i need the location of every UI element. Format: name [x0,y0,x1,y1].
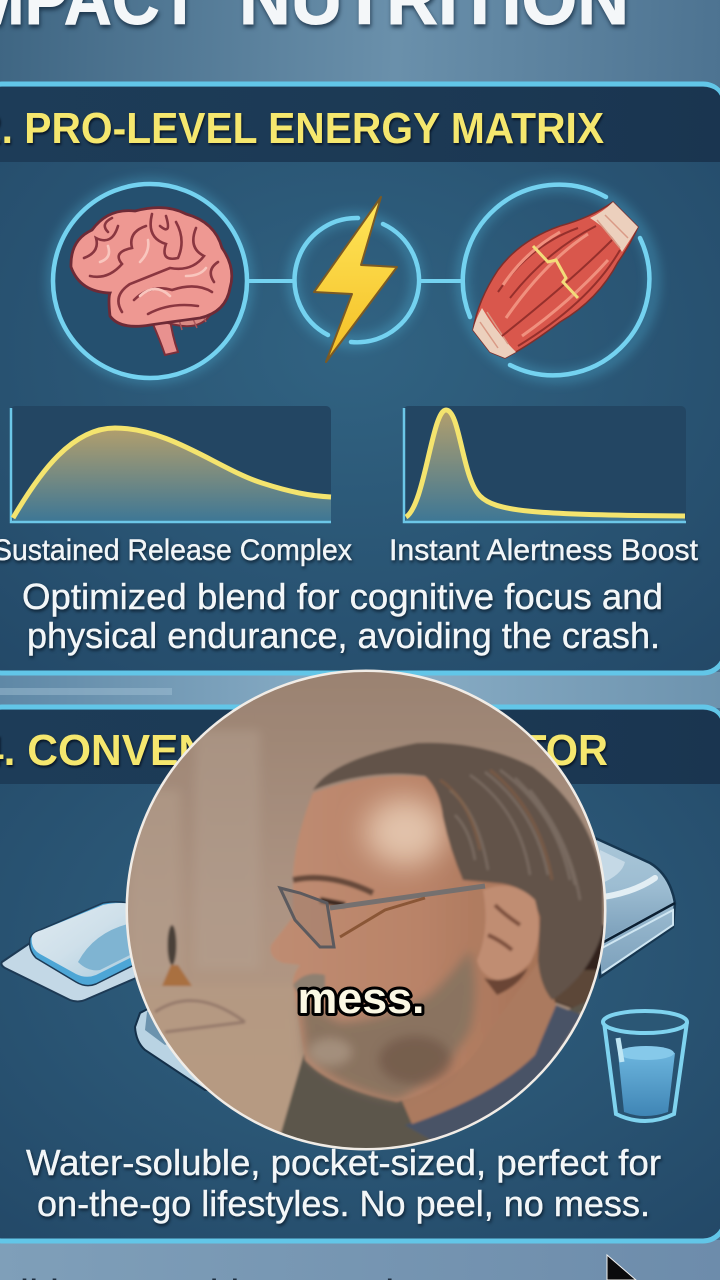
icon: lightning bolt [295,197,419,362]
chart: sustained release curve [10,406,331,522]
moustache [293,974,325,992]
face [270,776,540,1102]
forehead highlight [365,798,445,866]
panel: convenience factor [0,707,720,1241]
description text [22,576,663,656]
glasses [280,886,485,947]
icon: centre blister tablet [135,1000,240,1090]
caption: mess. [298,974,424,1023]
icon: left blister tablet [1,902,136,1002]
description text [26,1142,661,1224]
icon: right blister tablet [595,838,675,977]
chart labels: Instant Alertness Boost [389,534,699,567]
circular backdrop [127,671,605,1149]
description text: Water-soluble, pocket-sized, perfect for [26,1142,661,1183]
lower background band [0,1240,720,1280]
section header bar [0,710,720,784]
room wall and door [120,670,610,1150]
chart labels [0,534,699,567]
eyebrow and eye shadow [293,878,373,893]
chart labels: Sustained Release Complex [0,534,352,567]
connector lines [248,279,463,283]
neck [395,960,556,1124]
hair [313,743,603,1000]
gap strip between panels [0,672,720,708]
ring glow [53,184,654,378]
icon: mouse cursor [607,1255,636,1280]
heading [0,726,608,775]
icon: brain [53,184,247,378]
section header bar [0,87,720,162]
description text: Optimized blend for cognitive focus and [22,576,663,617]
icon: glass of water [603,1011,687,1121]
panel body [0,84,720,673]
ear [477,886,539,980]
icon: muscle [463,185,649,375]
figurine on shelf [162,925,192,986]
beard [300,950,475,1100]
title [0,0,629,40]
description text: physical endurance, avoiding the crash. [27,615,660,656]
dark gap behind neck [554,924,604,1012]
heading: FACTOR [438,726,608,775]
shirt [276,1000,590,1150]
presenter photo circle [120,670,610,1150]
description text: on-the-go lifestyles. No peel, no mess. [37,1183,650,1224]
chart: instant alertness curve [403,406,686,522]
panel body [0,707,720,1241]
connected icon diagram [53,184,654,378]
panel: pro-level energy matrix [0,84,720,673]
presenter portrait [120,670,610,1150]
